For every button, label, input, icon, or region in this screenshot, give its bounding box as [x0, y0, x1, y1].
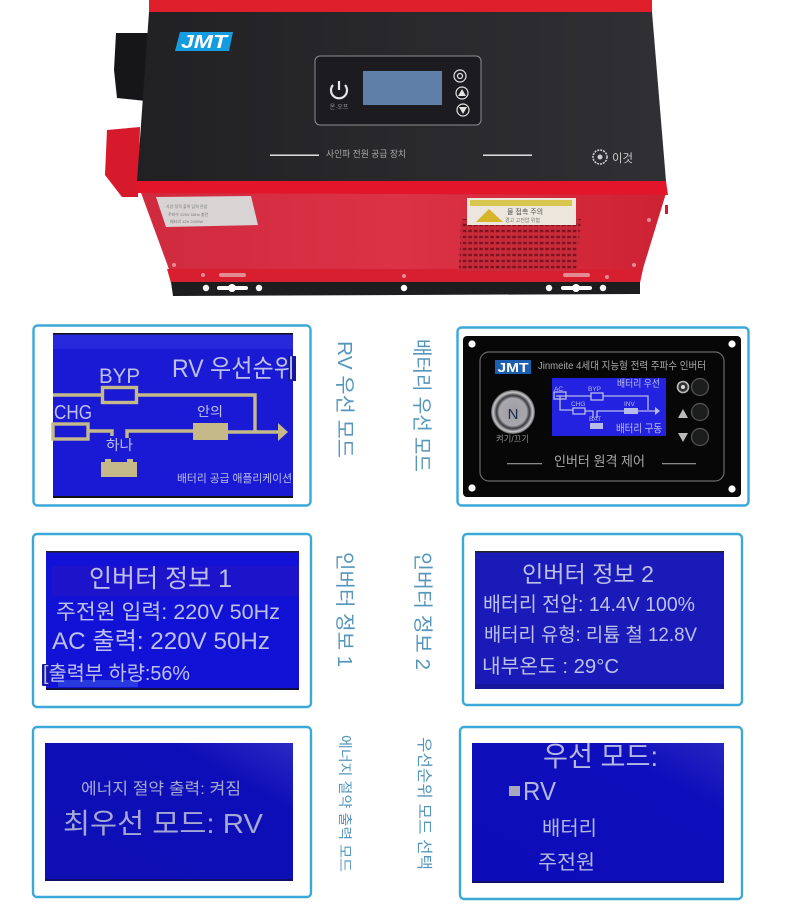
knob caption: 켜기/끄기: [496, 434, 529, 444]
panel: energy saving output: 에너지 절약 출력: 켜짐: [81, 780, 241, 798]
ventilation grille: [459, 219, 581, 271]
flow diagram: 하나: [106, 437, 133, 453]
panel: inverter info 2: 인버터 정보 2: [522, 561, 654, 587]
small LCD: [363, 71, 442, 105]
panel: energy saving output: [33, 727, 311, 897]
label: priority mode selection: 우선순위 모드 선택: [415, 737, 433, 870]
label: battery priority mode: 배터리 우선 모드: [410, 339, 433, 472]
brand mark: [593, 150, 633, 165]
panel: inverter info 2: [463, 534, 742, 705]
panel: RV priority mode: [34, 326, 310, 506]
panel: energy saving output: 최우선 모드: RV: [63, 808, 263, 839]
panel: inverter info 1: [출력부 하량:56%: [43, 662, 190, 685]
flange slots and screws: [172, 217, 651, 279]
rating label: 주파수 220V 50Hz 충전: [168, 211, 209, 217]
flow diagram: BYP: [99, 365, 140, 388]
remote LCD: BAT: [589, 416, 601, 423]
panel buttons: [454, 70, 469, 116]
left dark terminal block: [114, 33, 148, 101]
panel: priority mode selection: 배터리: [542, 817, 597, 840]
side tab: [665, 205, 668, 214]
rating label: [156, 196, 258, 227]
label: RV priority mode: RV 우선 모드: [333, 341, 356, 458]
label: energy saving output mode: 에너지 절약 출력 모드: [337, 735, 353, 872]
power icon: [331, 81, 347, 98]
remote header: Jinmeite 4세대 지능형 전력 주파수 인버터: [538, 360, 706, 372]
red terminal cover: [105, 127, 140, 197]
warning label: [467, 198, 576, 225]
mounting holes: [468, 340, 736, 493]
flow diagram: 안의: [197, 404, 223, 419]
black mounting bracket: [171, 282, 640, 296]
panel: inverter info 1: 주전원 입력: 220V 50Hz: [56, 601, 280, 624]
remote LCD: BYP: [588, 386, 601, 393]
remote LCD: 배터리 구동: [616, 422, 662, 435]
label: inverter info 1: 인버터 정보 1: [333, 552, 356, 667]
panel: inverter info 2: 배터리 유형: 리튬 철 12.8V: [484, 624, 697, 646]
power caption: 온·오프: [330, 104, 349, 111]
JMT logo: [175, 32, 233, 52]
control panel bezel: [315, 56, 481, 125]
panel: battery priority mode remote: [458, 328, 748, 506]
panel: priority mode selection: RV: [523, 776, 557, 806]
remote LCD: [552, 378, 666, 436]
black top panel: [137, 12, 666, 181]
screen status text: 배터리 공급 애플리케이션: [177, 472, 292, 485]
bottom red flange: [167, 269, 643, 283]
remote caption: 인버터 원격 제어: [554, 454, 645, 469]
front red band: [137, 181, 668, 195]
warning label: 물 접촉 주의: [507, 207, 543, 216]
panel: inverter info 1: 인버터 정보 1: [89, 565, 232, 593]
brand mark: 이것: [612, 152, 633, 165]
screen title: RV 우선순위: [172, 355, 295, 383]
top red edge: [149, 0, 652, 12]
JMT logo: JMT: [181, 32, 230, 52]
panel: priority mode selection: 주전원: [538, 851, 595, 874]
rating label: 배터리 12V 2000W: [170, 218, 203, 224]
power knob: N: [508, 406, 518, 423]
panel: priority mode selection: [460, 727, 742, 899]
panel button arrows: [458, 89, 467, 114]
product photo: inverter: [105, 0, 668, 296]
panel: inverter info 2: 배터리 전압: 14.4V 100%: [483, 593, 695, 616]
remote LCD: CHG: [571, 401, 585, 408]
rating label: 사양 정격 출력 입력 전압: [166, 203, 208, 209]
remote LCD: 배터리 우선: [617, 378, 660, 390]
label: inverter info 2: 인버터 정보 2: [411, 552, 434, 670]
panel: inverter info 1: AC 출력: 220V 50Hz: [52, 628, 270, 655]
red side body: [140, 190, 667, 272]
remote LCD: INV: [624, 401, 636, 408]
remote LCD: AC: [554, 386, 563, 393]
product slogan: 사인파 전원 공급 장치: [326, 148, 406, 159]
flow diagram: CHG: [54, 402, 92, 424]
flow diagram: [53, 365, 288, 477]
power knob: [491, 390, 535, 434]
panel: inverter info 1: [33, 534, 311, 707]
remote buttons: [678, 378, 708, 446]
warning label: 경고 고전압 위험: [505, 217, 540, 224]
remote JMT logo: JMT: [498, 360, 529, 375]
panel: priority mode selection: 우선 모드:: [543, 741, 658, 772]
panel: inverter info 2: 내부온도 : 29°C: [482, 655, 619, 678]
